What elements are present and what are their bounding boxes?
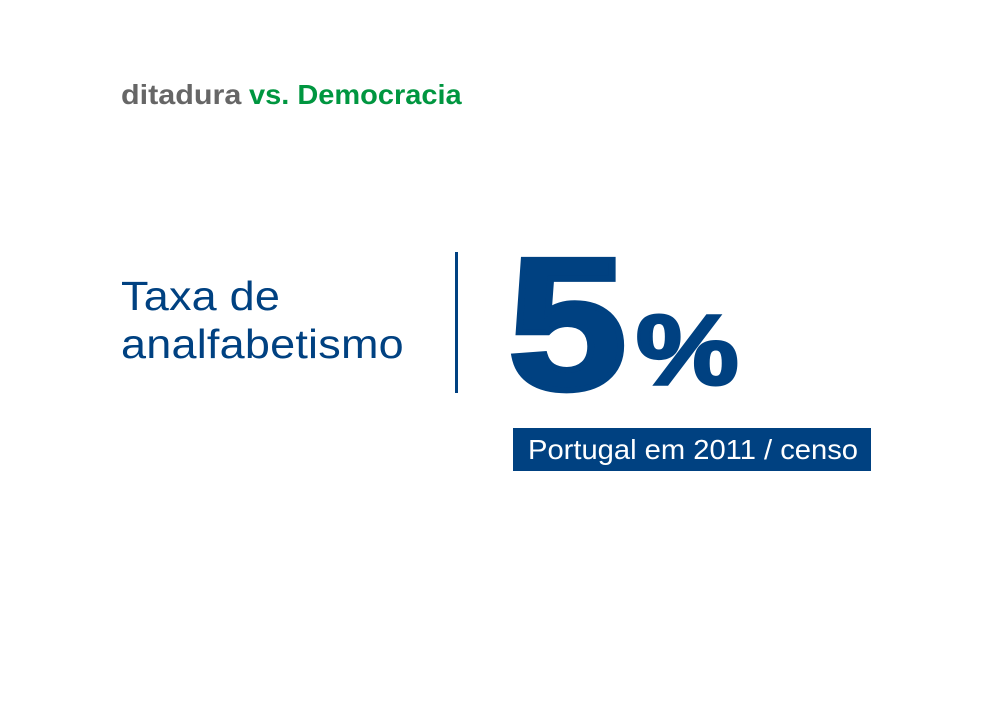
heading words: vs. Democracia: vs. Democracia bbox=[249, 79, 462, 110]
label: Taxa de analfabetismo: analfabetismo bbox=[121, 321, 404, 367]
heading: ditadura vs. Democracia bbox=[121, 79, 462, 110]
source tag: Portugal em 2011 / censo bbox=[513, 428, 871, 471]
label: Taxa de analfabetismo bbox=[121, 273, 404, 367]
label: Taxa de analfabetismo: Taxa de bbox=[121, 273, 280, 319]
vertical divider bbox=[455, 252, 458, 393]
heading word: ditadura: ditadura bbox=[121, 79, 241, 110]
source tag text: Portugal em 2011 / censo bbox=[528, 434, 858, 465]
percent sign: % bbox=[636, 295, 739, 405]
big number: 5: 5 bbox=[508, 220, 627, 429]
